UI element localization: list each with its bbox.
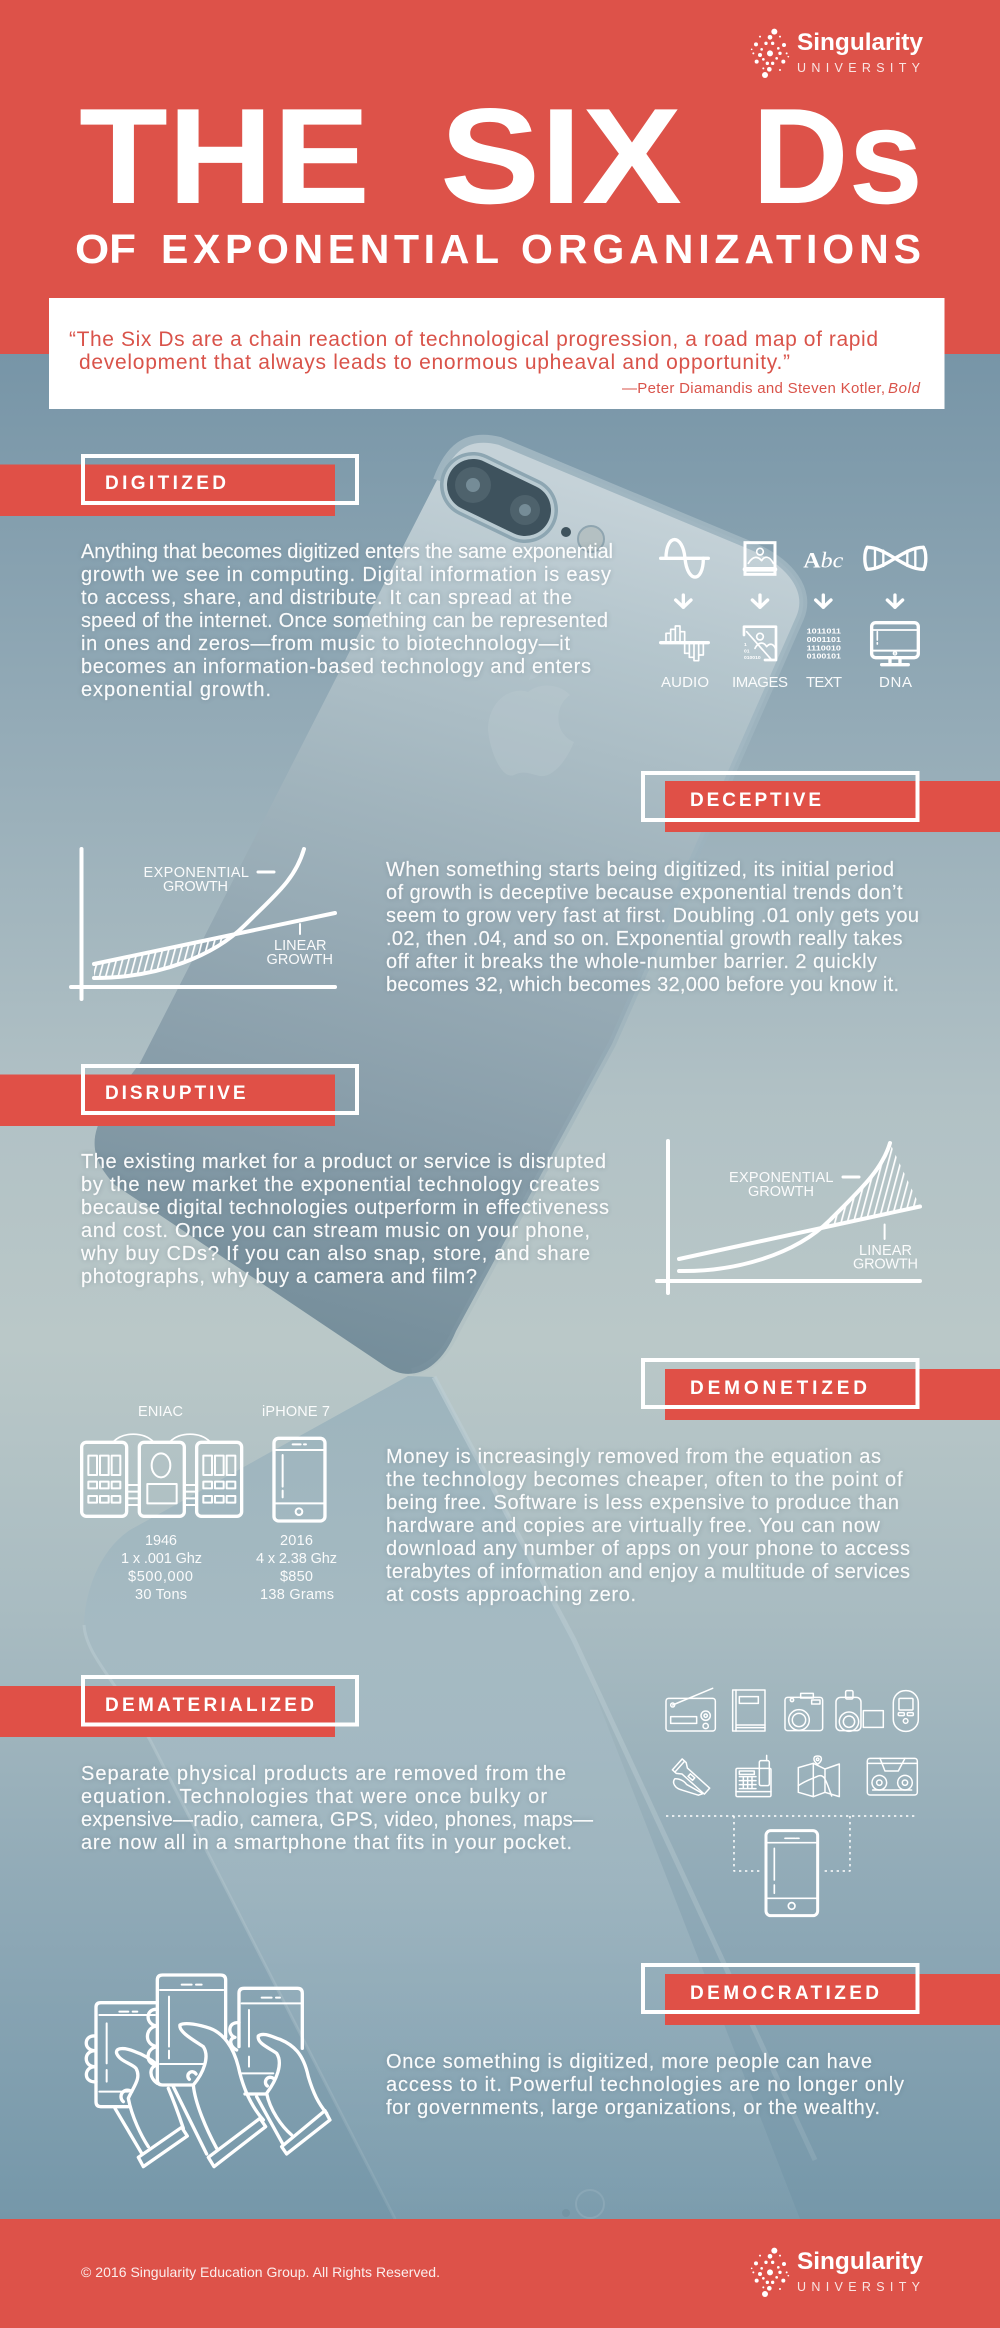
heading: deceptive (643, 773, 1000, 832)
text: dematerialized body: Separate physical products are removed from the (81, 1763, 566, 1785)
text: demonetized body: terabytes of information and enjoy a multitude of services (386, 1561, 910, 1583)
panel: quote: “The Six Ds are a chain reaction of technological progression, a road map of rapid (69, 328, 878, 351)
footer (0, 2219, 1000, 2328)
logo: Singularity University (751, 29, 924, 78)
comparison: ENIAC vs iPhone 7: 1 x .001 Ghz (121, 1551, 202, 1567)
text: disruptive body: photographs, why buy a camera and film? (81, 1266, 477, 1288)
text: deceptive body: seem to grow very fast at first. Doubling .01 only gets you (386, 905, 919, 927)
text: deceptive body: .02, then .04, and so on. Exponential growth really takes (386, 928, 902, 950)
text: demonetized body: download any number of apps on your phone to access (386, 1538, 910, 1560)
labels: icon captions: IMAGES (732, 674, 788, 691)
icon: radio (666, 1688, 715, 1731)
heading: democratized (643, 1965, 1000, 2025)
comparison: ENIAC vs iPhone 7: 138 Grams (260, 1587, 334, 1603)
chart: exponential vs linear, deceptive phase: EXPONENTIAL (144, 865, 249, 881)
icon: smartphone (766, 1831, 818, 1916)
section: demonetized (82, 1360, 1000, 1606)
text: disruptive body: and cost. Once you can stream music on your phone, (81, 1220, 590, 1242)
icons: digitization of audio, images, text, dna: 010010 (744, 655, 761, 661)
title: SIX (440, 80, 682, 232)
text: digitized body: speed of the internet. Once something can be represented (81, 610, 608, 632)
icons: digitization of audio, images, text, dna: 1 (744, 642, 747, 648)
comparison: ENIAC vs iPhone 7: 30 Tons (135, 1587, 187, 1603)
heading: disruptive: DISRUPTIVE (105, 1083, 246, 1104)
subtitle (75, 226, 921, 272)
labels: icon captions: TEXT (806, 674, 842, 691)
text: disruptive body: by the new market the exponential technology creates (81, 1174, 600, 1196)
text: disruptive body: The existing market for a product or service is disrupted (81, 1151, 606, 1173)
panel: quote: Bold (888, 380, 921, 397)
middle hand and phone (157, 1975, 266, 2167)
text: digitized body: to access, share, and distribute. It can spread at the (81, 587, 572, 609)
heading: democratized: DEMOCRATIZED (690, 1983, 879, 2004)
panel: quote (49, 298, 944, 409)
comparison: ENIAC vs iPhone 7: 4 x 2.38 Ghz (256, 1551, 337, 1567)
icons: digitization of audio, images, text, dna (661, 540, 926, 691)
chart: exponential vs linear, deceptive phase: LINEAR (274, 938, 326, 954)
section: dematerialized (0, 1677, 918, 1916)
title: Ds (752, 80, 923, 232)
chart: exponential vs linear, disruptive phase: GROWTH (853, 1256, 918, 1272)
title (79, 80, 923, 232)
icon: starburst (751, 29, 789, 78)
icon: sine wave (661, 540, 708, 577)
logo: Singularity University footer (751, 2248, 924, 2297)
subtitle: ORGANIZATIONS (521, 226, 921, 272)
subtitle: EXPONENTIAL (161, 226, 499, 272)
text: digitized body: becomes an information-based technology and enters (81, 656, 591, 678)
text: dematerialized body: are now all in a smartphone that fits in your pocket. (81, 1832, 572, 1854)
section: disruptive (0, 1066, 920, 1293)
arrows (676, 595, 903, 607)
text: demonetized body: the technology becomes cheaper, often to the point of (386, 1469, 903, 1491)
section: democratized (86, 1965, 1000, 2167)
text: disruptive body: why buy CDs? If you can also snap, store, and share (80, 1243, 590, 1265)
comparison: ENIAC vs iPhone 7: iPHONE 7 (262, 1404, 330, 1420)
subtitle: OF (75, 226, 136, 272)
icon: apple logo (488, 660, 574, 776)
text: demonetized body (386, 1446, 910, 1606)
text: digitized body: Anything that becomes digitized enters the same exponential (81, 541, 613, 563)
icon: video camera (836, 1691, 883, 1731)
logo: Singularity University: UNIVERSITY (797, 61, 921, 75)
icon: binary text: 0001101 (807, 635, 842, 644)
right hand and phone (230, 1988, 330, 2154)
text: deceptive body: of growth is deceptive because exponential trends don’t (386, 882, 903, 904)
text: deceptive body: When something starts being digitized, its initial period (386, 859, 894, 881)
chart: exponential vs linear, deceptive phase: GROWTH (266, 952, 333, 968)
icon: binary text: 1011011 (807, 626, 842, 635)
text: demonetized body: being free. Software is less expensive to produce than (386, 1492, 899, 1514)
header band (0, 0, 1000, 354)
chart: exponential vs linear, disruptive phase: LINEAR (859, 1243, 912, 1259)
icon: desk phone (736, 1755, 771, 1797)
chart: exponential vs linear, deceptive phase (71, 849, 335, 999)
connector: dotted bracket (666, 1816, 917, 1871)
labels: icon captions (661, 674, 912, 691)
comparison: ENIAC vs iPhone 7: $850 (280, 1569, 313, 1585)
heading: deceptive: DECEPTIVE (690, 790, 821, 811)
heading: digitized: DIGITIZED (105, 473, 226, 494)
text: digitized body: growth we see in computing. Digital information is easy (81, 564, 611, 586)
heading: demonetized (643, 1360, 1000, 1420)
panel: quote: development that always leads to enormous upheaval and opportunity.” (79, 351, 790, 374)
comparison: ENIAC vs iPhone 7: 1946 (145, 1533, 177, 1549)
icon: cassette (867, 1758, 917, 1795)
camera module (455, 467, 604, 552)
icon: binary text: 1110010 (807, 644, 841, 653)
heading: demonetized: DEMONETIZED (690, 1378, 867, 1399)
comparison: ENIAC vs iPhone 7 (82, 1404, 337, 1603)
text: dematerialized body (81, 1763, 593, 1854)
comparison: ENIAC vs iPhone 7: $500,000 (128, 1569, 193, 1585)
text: digitized body: in ones and zeros—from music to biotechnology—it (81, 633, 570, 655)
logo: Singularity University: Singularity (797, 29, 924, 56)
labels: icon captions: AUDIO (661, 674, 709, 691)
icons: digitization of audio, images, text, dna: 01 (744, 649, 750, 655)
panel: quote: —Peter Diamandis and Steven Kotler, (622, 380, 885, 397)
text: deceptive body (386, 859, 919, 996)
icons: products absorbed into smartphone (665, 1688, 918, 1916)
text: democratized body: access to it. Powerful technologies are no longer only (386, 2074, 904, 2096)
icon: camera (785, 1693, 823, 1731)
text: digitized body (81, 541, 613, 701)
text: dematerialized body: equation. Technologies that were once bulky or (81, 1786, 547, 1808)
heading: digitized (0, 456, 357, 516)
chart: exponential vs linear, disruptive phase: GROWTH (748, 1184, 814, 1200)
comparison: ENIAC vs iPhone 7: 2016 (280, 1533, 313, 1549)
chart: exponential vs linear, disruptive phase: EXPONENTIAL (729, 1170, 834, 1186)
icon: binary text: 0100101 (807, 652, 842, 661)
chart: exponential vs linear, deceptive phase: GROWTH (163, 879, 228, 895)
heading: dematerialized: DEMATERIALIZED (105, 1695, 314, 1716)
text: disruptive body (80, 1151, 609, 1288)
text: deceptive body: off after it breaks the whole-number barrier. 2 quickly (386, 951, 877, 973)
icon: monitor (872, 623, 918, 665)
icon: binary text (807, 626, 842, 661)
icon: map with pin (798, 1756, 839, 1797)
iphone reflection (84, 1376, 815, 2219)
left hand and phone (86, 2003, 187, 2167)
labels: icon captions: DNA (879, 674, 912, 691)
icon: digital image (744, 627, 776, 660)
text: demonetized body: Money is increasingly removed from the equation as (386, 1446, 881, 1468)
icon: three hands holding phones (86, 1975, 330, 2167)
text: copyright: © 2016 Singularity Education Group. All Rights Reserved. (81, 2264, 440, 2280)
logo: Singularity University footer: Singularity (797, 2248, 924, 2275)
text: deceptive body: becomes 32, which becomes 32,000 before you know it. (386, 974, 899, 996)
text: demonetized body: at costs approaching zero. (386, 1584, 636, 1606)
text: dematerialized body: expensive—radio, camera, GPS, video, phones, maps— (81, 1809, 593, 1831)
chart: exponential vs linear, disruptive phase (657, 1141, 920, 1293)
icon: flashlight (665, 1759, 712, 1804)
text: democratized body: Once something is digitized, more people can have (386, 2051, 872, 2073)
section: deceptive (71, 773, 1000, 999)
text: demonetized body: hardware and copies are virtually free. You can now (386, 1515, 881, 1537)
title: THE (79, 80, 370, 232)
iphone back (95, 439, 803, 1374)
icon: dna helix (865, 547, 926, 569)
heading: disruptive (0, 1066, 357, 1126)
text: digitized body: exponential growth. (81, 679, 271, 701)
text: democratized body: for governments, large organizations, or the wealthy. (386, 2097, 880, 2119)
icon: digital audio (661, 626, 708, 661)
comparison: ENIAC vs iPhone 7: ENIAC (138, 1404, 183, 1420)
icon: gps device (893, 1691, 918, 1731)
icon: Abc: Abc (803, 547, 844, 572)
text: disruptive body: because digital technologies outperform in effectiveness (81, 1197, 609, 1219)
icon: image frame (745, 543, 775, 574)
heading: dematerialized (0, 1677, 357, 1737)
icon: ENIAC cabinets (82, 1434, 242, 1516)
section: digitized (0, 456, 926, 701)
logo: Singularity University footer: UNIVERSITY (797, 2280, 921, 2294)
icon: iPhone 7 (274, 1438, 325, 1521)
text: democratized body (386, 2051, 904, 2119)
icon: book (733, 1690, 765, 1731)
